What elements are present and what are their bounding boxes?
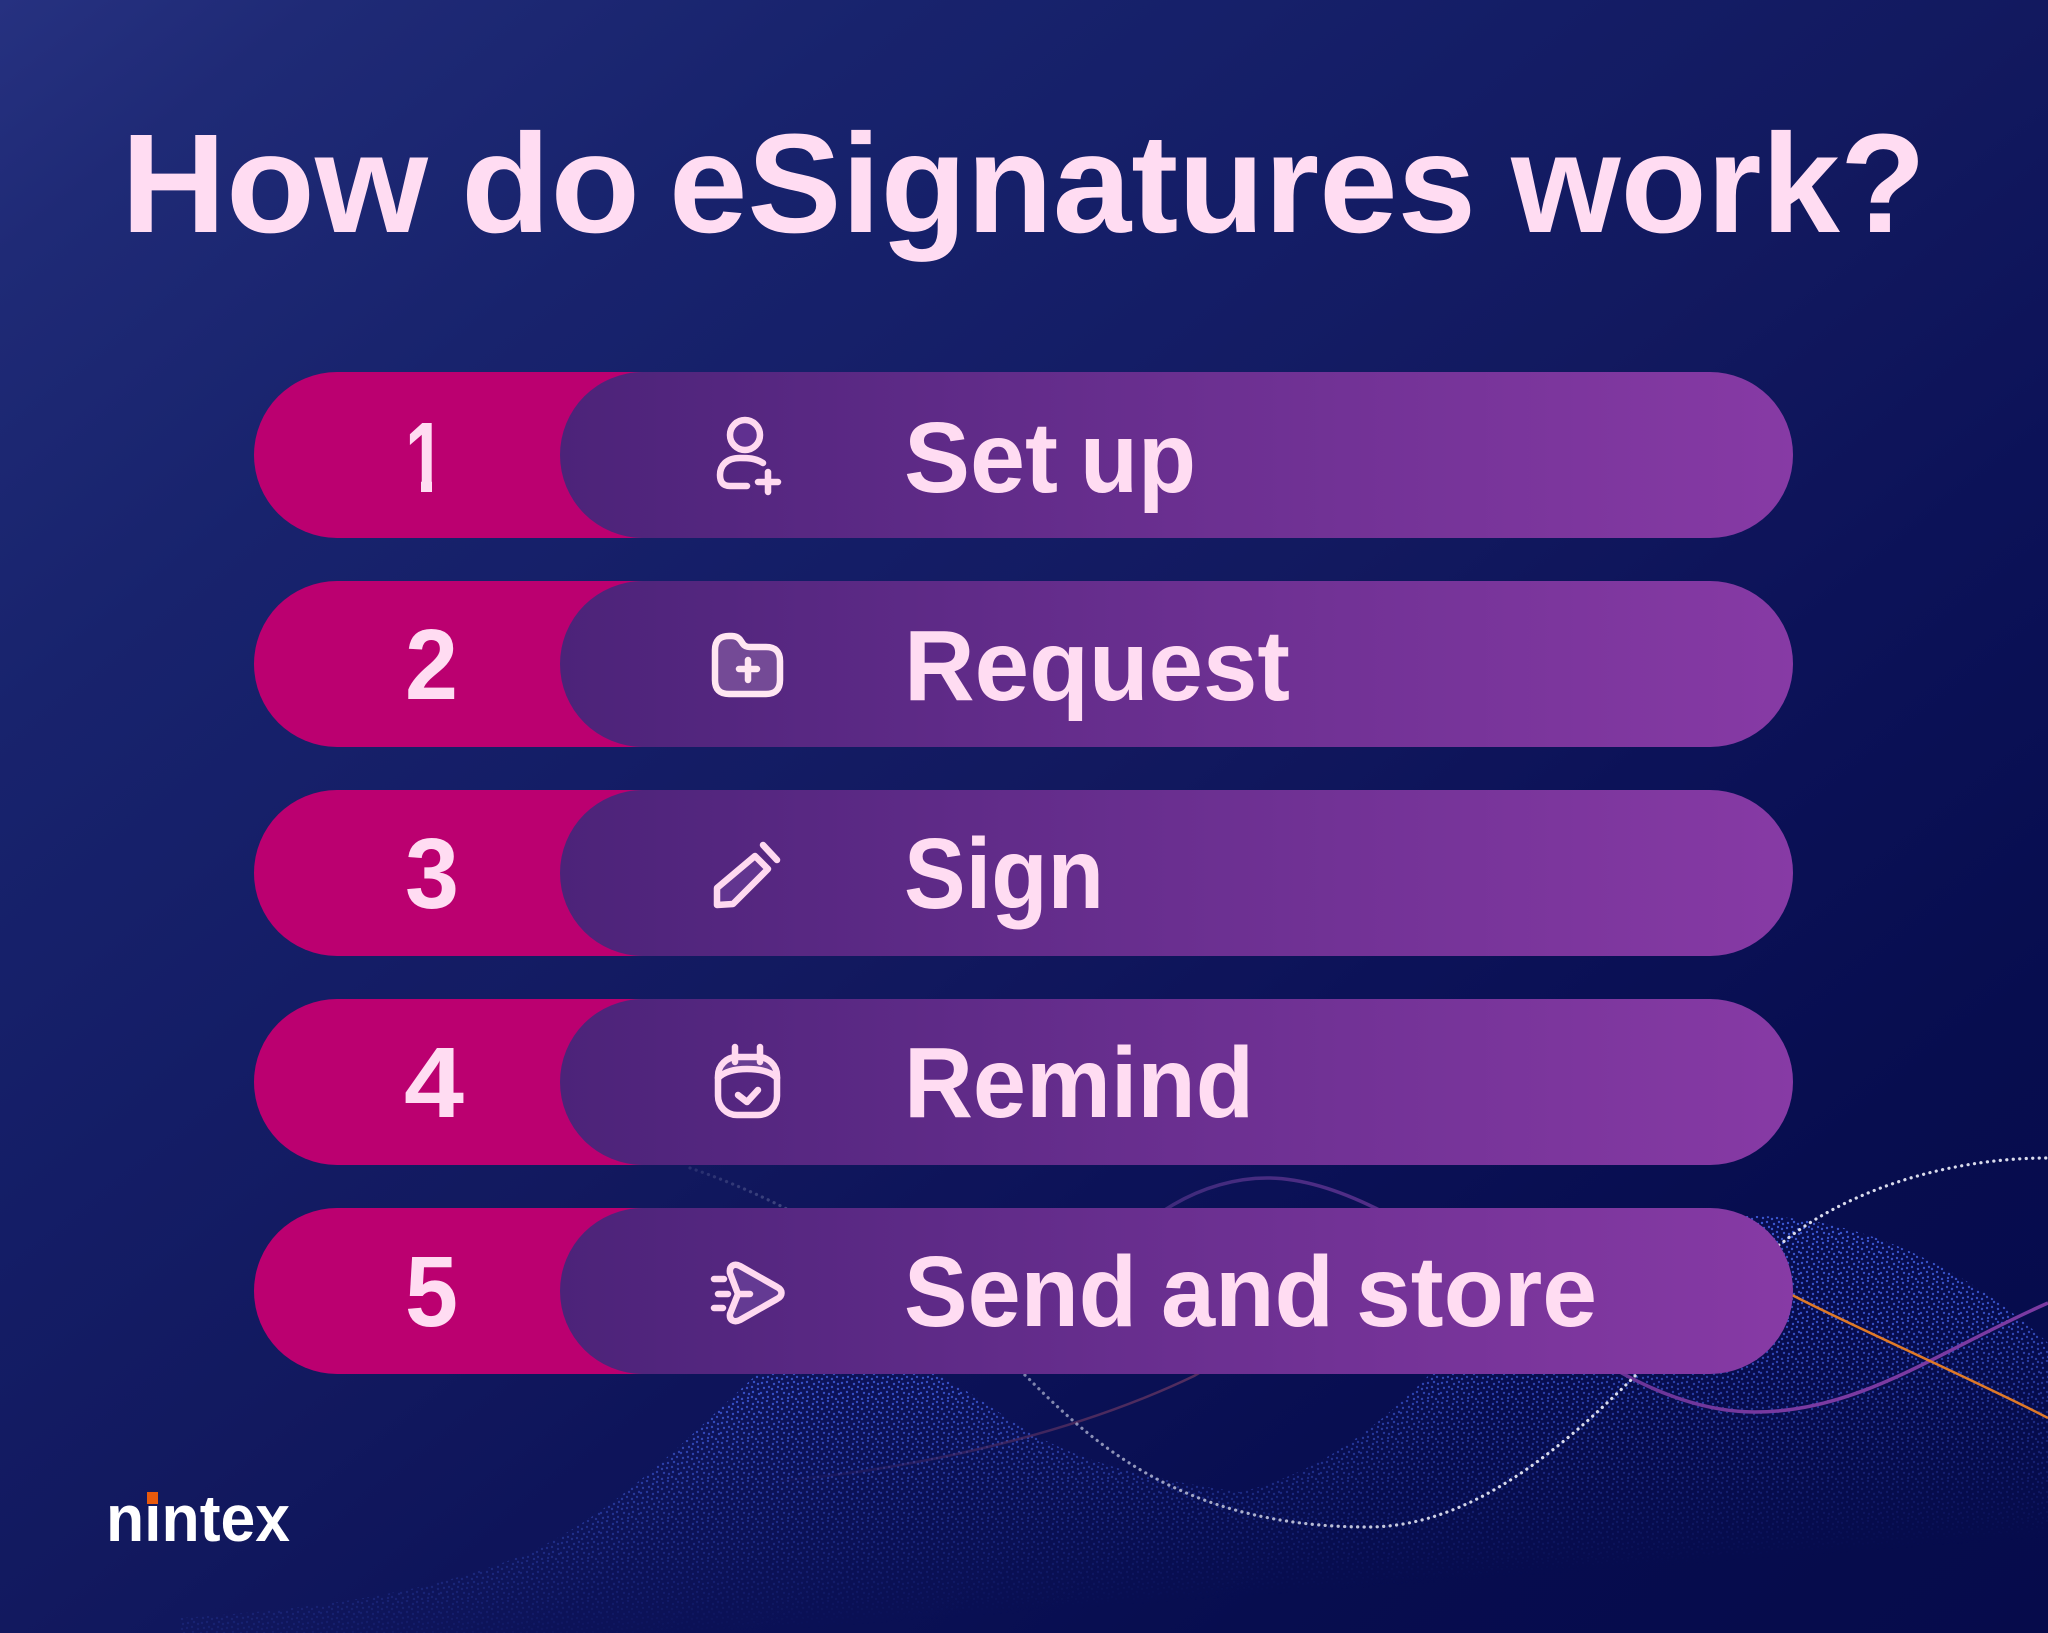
number tab 4 — [254, 999, 754, 1165]
title: do — [461, 104, 640, 262]
number 5: 5 — [405, 1236, 458, 1348]
dotted white wave line — [690, 1158, 2048, 1527]
number tab 5 — [254, 1208, 754, 1374]
icon: folder plus — [715, 636, 780, 694]
label: send and store — [904, 1236, 1597, 1348]
orange wave line — [780, 1232, 2048, 1481]
icon: send — [714, 1265, 782, 1321]
icon: add user — [720, 420, 778, 492]
step bar 4 — [560, 999, 1793, 1165]
label: set up — [904, 402, 1196, 514]
title: work? — [1510, 104, 1926, 262]
number tab 3 — [254, 790, 754, 956]
purple wave line — [1100, 1178, 2048, 1412]
label: send and store: Send — [904, 1236, 1137, 1348]
dotted hills decoration — [180, 1216, 2048, 1633]
number tab 2 — [254, 581, 754, 747]
step bar 3 — [560, 790, 1793, 956]
label: remind: Remind — [904, 1027, 1254, 1139]
number tab 1 — [254, 372, 754, 538]
step 2: request — [254, 581, 1793, 747]
number 4: 4 — [404, 1027, 464, 1139]
title: How — [121, 104, 428, 262]
logo: nintex: nintex — [106, 1481, 290, 1555]
label: set up: up — [1080, 402, 1196, 514]
title — [121, 104, 1926, 262]
label: request: Request — [904, 610, 1290, 722]
step 3: sign — [254, 790, 1793, 956]
step bar 1 — [560, 372, 1793, 538]
step 5: send and store — [254, 1208, 1793, 1374]
icon: pencil — [717, 845, 777, 905]
step bar 2 — [560, 581, 1793, 747]
label: send and store: and — [1161, 1236, 1334, 1348]
label: set up: Set — [904, 402, 1058, 514]
step 1: set up — [254, 372, 1793, 538]
step 4: remind — [254, 999, 1793, 1165]
title: eSignatures — [669, 104, 1476, 262]
logo accent dot — [147, 1492, 158, 1504]
icon: calendar check — [718, 1047, 777, 1115]
number 2: 2 — [405, 609, 458, 721]
label: sign: Sign — [904, 818, 1104, 930]
wave lines — [690, 1158, 2048, 1527]
number 1: 1 — [405, 402, 445, 514]
label: send and store: store — [1356, 1236, 1597, 1348]
number 3: 3 — [405, 818, 459, 930]
step bar 5 — [560, 1208, 1793, 1374]
